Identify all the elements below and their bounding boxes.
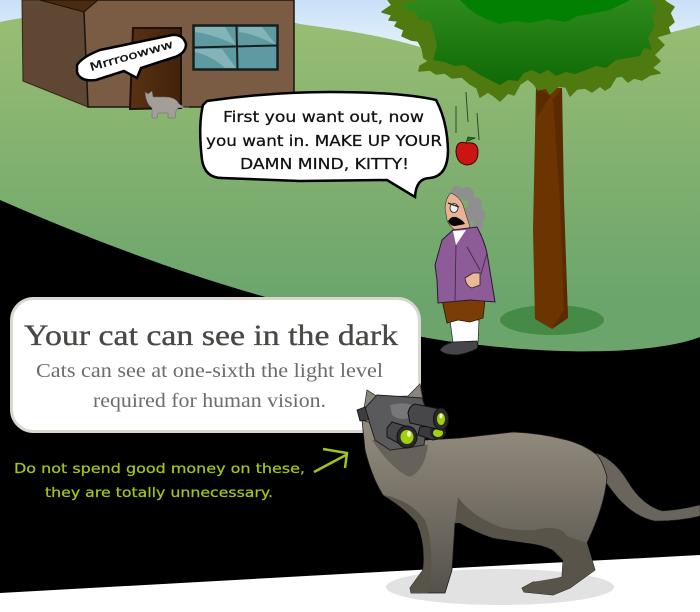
goggle mask: [365, 395, 428, 450]
big cat: [357, 384, 700, 595]
big cat shadow: [386, 569, 614, 605]
heading: Your cat can see in the dark: [24, 319, 398, 352]
goggles caption: [14, 462, 305, 501]
arrow: [314, 449, 347, 472]
tree: [382, 0, 674, 335]
night vision goggles: [357, 395, 448, 450]
body: [362, 420, 607, 595]
canopy outer foliage: [382, 0, 674, 101]
info box: [12, 298, 420, 432]
canopy top foliage: [460, 0, 630, 24]
description: required for human vision.: [93, 390, 326, 412]
back tube: [418, 424, 446, 440]
breeches: [442, 300, 485, 323]
roof: [40, 0, 98, 12]
small grey cat: [145, 91, 189, 118]
speech bubble: man: [200, 92, 448, 197]
shirt: [453, 230, 466, 245]
goggles caption: Do not spend good money on these,: [14, 462, 305, 477]
upper tube: [408, 404, 448, 430]
speech bubble: man: DAMN MIND, KITTY!: [240, 155, 409, 173]
description: Cats can see at one-sixth the light level: [36, 360, 383, 382]
lower tube: [387, 422, 417, 448]
white foreground: [0, 555, 700, 612]
window: [193, 26, 278, 70]
eye and mouth: [448, 203, 465, 226]
strap: [357, 407, 369, 421]
tree shadow: [500, 305, 604, 335]
coat: [435, 227, 495, 303]
house front wall: [84, 0, 294, 107]
black ground: [0, 200, 700, 612]
house side wall: [22, 0, 88, 107]
speech bubble: man: you want in. MAKE UP YOUR: [206, 132, 442, 150]
belly shading: [455, 497, 595, 595]
speech bubble: Mrrroowww: Mrrroowww: [88, 38, 174, 74]
man: [435, 186, 495, 355]
motion lines: [456, 92, 479, 140]
hair: [451, 186, 486, 230]
door: [130, 28, 181, 109]
stockings: [450, 320, 479, 343]
speech bubble: Mrrroowww: [77, 35, 186, 80]
chin shading: [372, 440, 428, 477]
shoes: [440, 341, 478, 355]
canopy middle foliage: [402, 0, 658, 85]
tail: [596, 453, 700, 521]
front leg shading: [383, 495, 431, 593]
ears: [363, 384, 423, 415]
face: [445, 193, 470, 231]
speech bubble: man: First you want out, now: [223, 108, 424, 126]
trunk: [533, 86, 568, 329]
goggles caption: they are totally unnecessary.: [45, 486, 273, 501]
sky: [0, 0, 700, 70]
green hills: [0, 12, 700, 420]
description: [36, 360, 383, 412]
hand: [465, 273, 480, 288]
falling apple: [456, 92, 479, 165]
house: [22, 0, 294, 109]
